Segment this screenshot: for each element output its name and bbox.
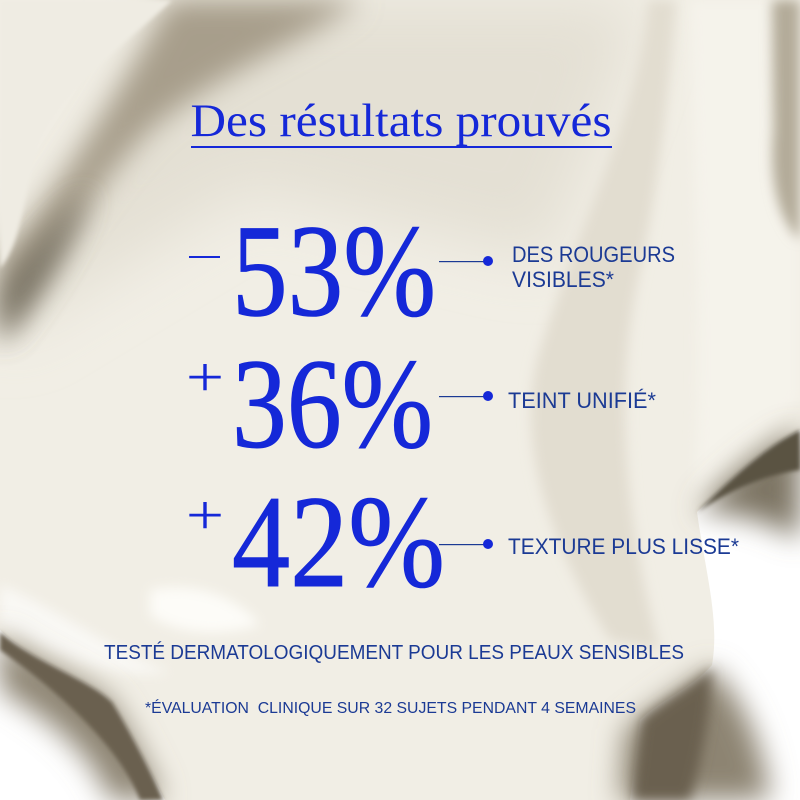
footnote: *ÉVALUATION CLINIQUE SUR 32 SUJETS PENDANT 4 SEMAINES: [145, 698, 636, 717]
stat: minus 53 percent: 53%: [232, 197, 436, 344]
stat: plus 42 percent: [186, 468, 739, 615]
label: rougeurs: DES ROUGEURS: [512, 242, 675, 267]
tested statement: TESTÉ DERMATOLOGIQUEMENT POUR LES PEAUX SENSIBLES: [104, 641, 684, 664]
label: rougeurs: VISIBLES*: [512, 267, 614, 292]
title: Des résultats prouvés: [190, 95, 612, 147]
background: bottom right white with shadow: [560, 430, 800, 800]
label: teint: TEINT UNIFIÉ*: [508, 388, 656, 413]
stat: plus 36 percent: [186, 333, 656, 475]
stat: minus 53 percent: [189, 197, 675, 344]
background: bottom left white with shadow: [0, 630, 165, 800]
stat: plus 36 percent: 36%: [232, 333, 433, 475]
label: texture: TEXTURE PLUS LISSE*: [508, 534, 739, 559]
stat: plus 42 percent: +: [186, 485, 224, 547]
stat: plus 36 percent: +: [186, 347, 224, 409]
stat: plus 42 percent: 42%: [232, 468, 445, 615]
